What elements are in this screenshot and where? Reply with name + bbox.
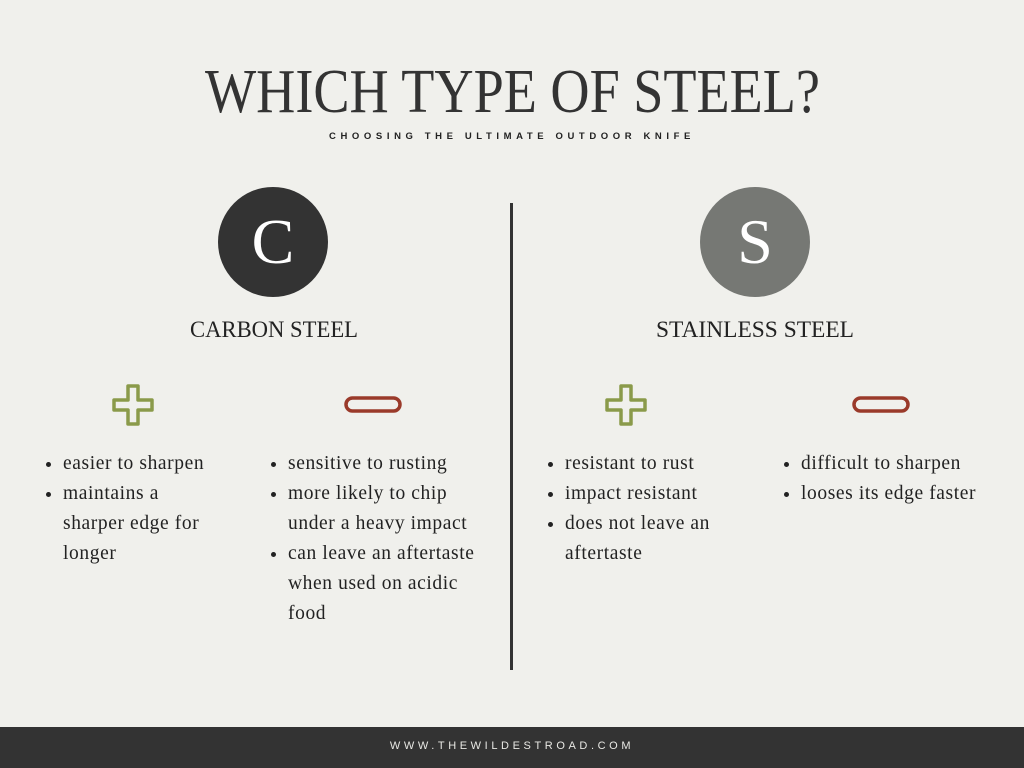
footer: WWW.THEWILDESTROAD.COM	[390, 740, 634, 752]
icon: carbon minus	[344, 396, 402, 413]
heading: stainless steel: STAINLESS STEEL	[656, 317, 854, 342]
icon: carbon plus	[112, 384, 154, 426]
list: carbon cons: sensitive to rusting	[288, 453, 447, 474]
icon: carbon C circle	[218, 187, 328, 297]
divider	[510, 203, 513, 670]
list: stainless pros: resistant to rust	[565, 453, 694, 474]
icon: stainless plus	[605, 384, 647, 426]
list: stainless cons: looses its edge faster	[801, 483, 976, 504]
icon: stainless S circle	[700, 187, 810, 297]
list: stainless cons	[784, 453, 976, 504]
list: carbon pros: maintains a sharper edge for longer	[63, 483, 199, 564]
list: stainless cons: difficult to sharpen	[801, 453, 961, 474]
list: carbon cons: can leave an aftertaste when used on acidic food	[288, 543, 474, 624]
list: stainless pros: impact resistant	[565, 483, 698, 504]
list: carbon pros: easier to sharpen	[63, 453, 204, 474]
list: carbon cons	[271, 453, 474, 624]
footer	[0, 727, 1024, 768]
icon: stainless minus	[852, 396, 910, 413]
list: stainless pros: does not leave an aftertaste	[565, 513, 710, 564]
icon: carbon C circle: C	[252, 206, 294, 277]
title: WHICH TYPE OF STEEL?	[205, 58, 820, 125]
list: carbon pros	[46, 453, 204, 564]
subtitle: CHOOSING THE ULTIMATE OUTDOOR KNIFE	[329, 131, 695, 142]
heading: carbon steel: CARBON STEEL	[190, 317, 358, 342]
list: stainless pros	[548, 453, 710, 564]
icon: stainless S circle: S	[737, 206, 773, 277]
list: carbon cons: more likely to chip under a heavy impact	[288, 483, 467, 534]
